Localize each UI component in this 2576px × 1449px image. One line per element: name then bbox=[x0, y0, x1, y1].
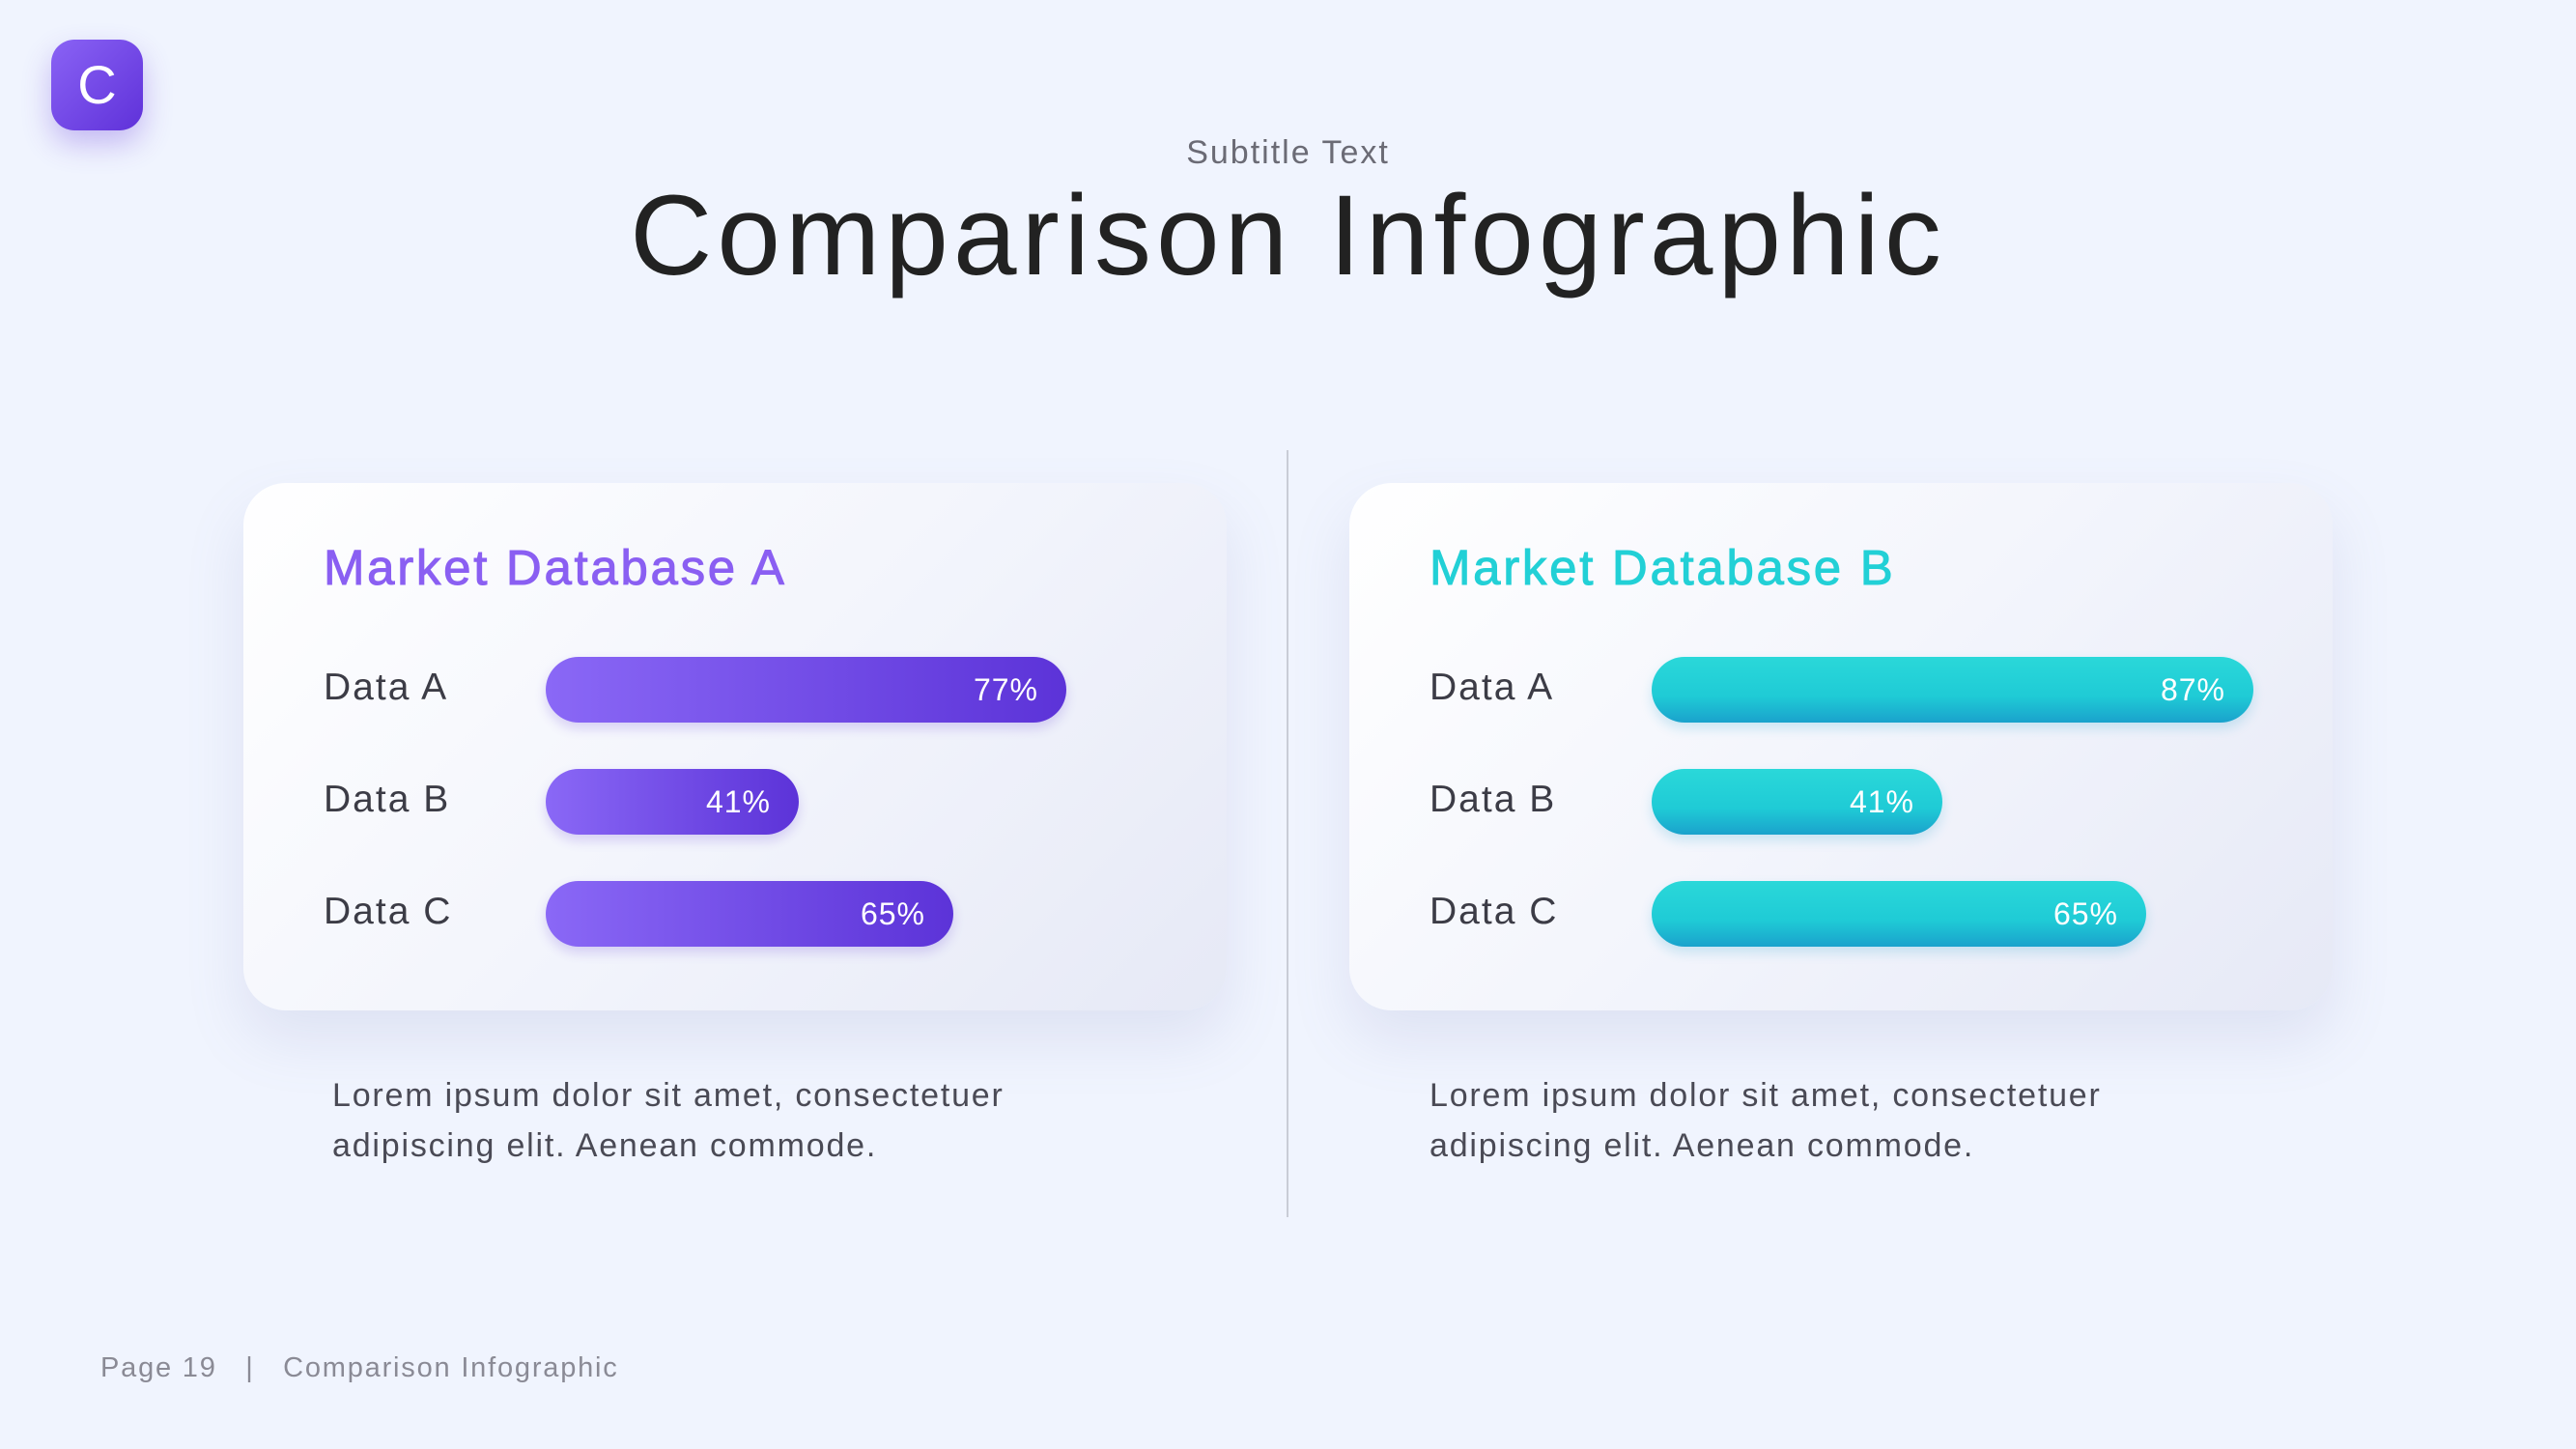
row A: Data A bbox=[324, 667, 448, 708]
row A: Data A bbox=[1430, 667, 1554, 708]
bar C 65%: 65% bbox=[861, 896, 925, 931]
text B bbox=[1430, 1077, 2102, 1164]
row B: Data B bbox=[324, 779, 450, 820]
bar A 77% bbox=[546, 657, 1066, 723]
heading A: Market Database A bbox=[324, 540, 787, 595]
footer: Page 19 | Comparison Infographic bbox=[100, 1352, 619, 1383]
bar B 41%: 41% bbox=[1850, 784, 1914, 819]
bar B 41% bbox=[1652, 769, 1942, 835]
bar B 41%: 41% bbox=[706, 784, 771, 819]
subtitle: Subtitle Text bbox=[1186, 134, 1390, 171]
bar C 65%: 65% bbox=[2053, 896, 2118, 931]
logo icon bbox=[51, 40, 143, 130]
text A: adipiscing elit. Aenean commode. bbox=[332, 1127, 877, 1164]
bar A 87% bbox=[1652, 657, 2253, 723]
panel: database B bbox=[1349, 483, 2333, 1010]
text A: Lorem ipsum dolor sit amet, consectetuer bbox=[332, 1077, 1005, 1114]
bar A 87%: 87% bbox=[2161, 672, 2225, 707]
row C: Data C bbox=[324, 891, 452, 932]
row B: Data B bbox=[1430, 779, 1556, 820]
heading B: Market Database B bbox=[1430, 540, 1895, 595]
text B: Lorem ipsum dolor sit amet, consectetuer bbox=[1430, 1077, 2102, 1114]
text A bbox=[332, 1077, 1005, 1164]
bar C 65% bbox=[546, 881, 953, 947]
bar C 65% bbox=[1652, 881, 2146, 947]
bar B 41% bbox=[546, 769, 799, 835]
bar A 77%: 77% bbox=[974, 672, 1038, 707]
title: Comparison Infographic bbox=[630, 172, 1946, 299]
panel: database A bbox=[243, 483, 1227, 1010]
row C: Data C bbox=[1430, 891, 1558, 932]
text B: adipiscing elit. Aenean commode. bbox=[1430, 1127, 1974, 1164]
logo icon: C bbox=[77, 54, 117, 115]
